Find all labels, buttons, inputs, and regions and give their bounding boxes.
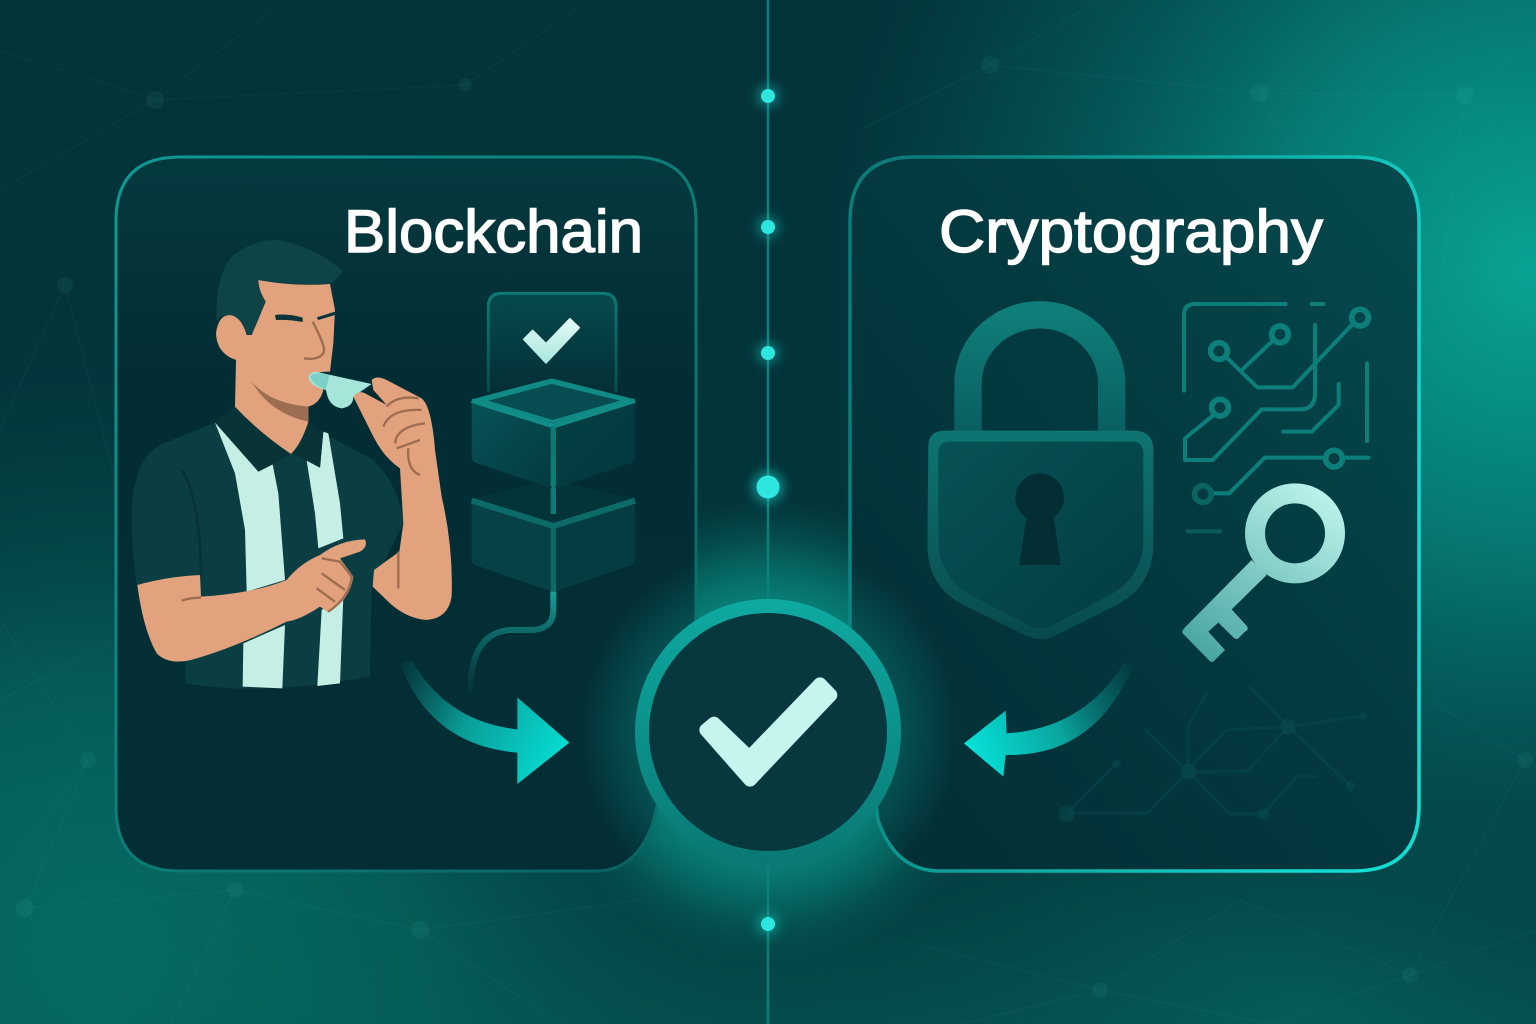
illustration: padlock [927,315,1153,639]
illustration: key [1182,493,1335,662]
center glow over panels [578,542,958,922]
central vertical line with dots [753,0,783,1024]
panel: blockchain [116,157,696,871]
illustration: stacked blockchain blocks [471,293,635,692]
arrow: blockchain to check [400,660,569,784]
illustration: circuit traces [1184,304,1368,531]
heading: Cryptography: Cryptography [939,198,1323,265]
heading: Blockchain: Blockchain [344,198,643,265]
center check badge [635,599,901,865]
arrow: cryptography to check [964,663,1134,777]
illustration: referee blowing whistle [132,240,452,689]
panel: cryptography [850,157,1419,871]
decorative circuit network in panel [1059,687,1367,821]
icon: checkmark [706,684,831,780]
